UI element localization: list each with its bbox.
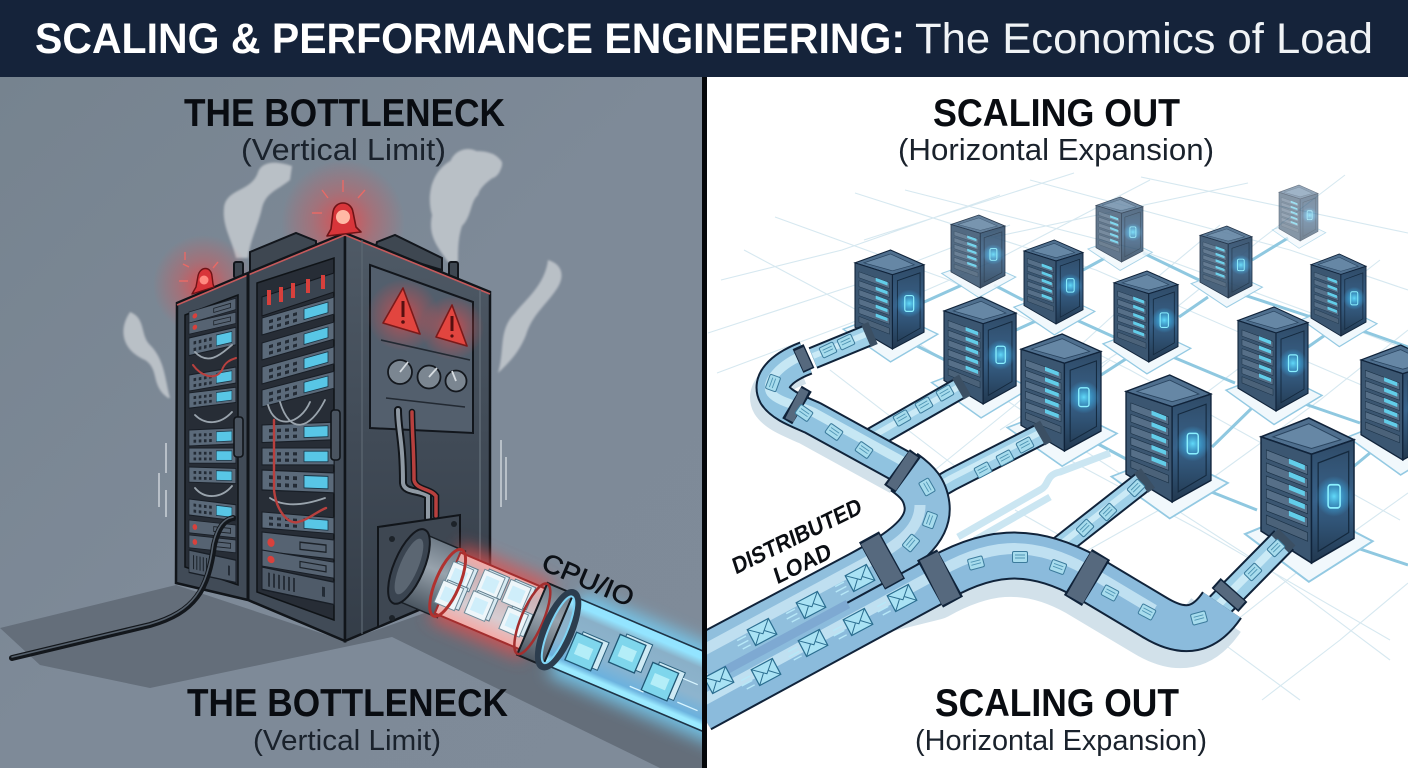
heading: the bottleneck top: (Vertical Limit): [241, 132, 446, 167]
pipe couplings: [792, 333, 1287, 600]
red congested section: [428, 548, 545, 650]
panel: the bottleneck: [0, 77, 777, 768]
data packets in pipes: [765, 334, 1285, 625]
heading: the bottleneck top: [184, 99, 504, 166]
network connection lines: [909, 238, 1408, 565]
panel: scaling out: [690, 77, 1408, 768]
center divider: [702, 77, 707, 768]
server rack cabinet: [176, 233, 490, 641]
right rack server units: [262, 297, 334, 605]
heading: scaling out top: SCALING OUT: [933, 92, 1180, 135]
red alarm beacons: [179, 180, 365, 294]
upper branch pipe: [769, 354, 904, 468]
title banner: The Economics of Load: [915, 15, 1373, 63]
blue flowing section: [546, 598, 702, 732]
red alarm glow: [158, 167, 398, 320]
main upper pipe: [700, 472, 927, 659]
heading: the bottleneck bottom: (Vertical Limit): [253, 725, 441, 757]
floor power cable: [12, 517, 233, 658]
title banner: [0, 0, 1408, 77]
rack interior panels: [185, 258, 334, 620]
heading: the bottleneck bottom: THE BOTTLENECK: [187, 682, 508, 725]
envelopes in main pipe: [690, 564, 917, 701]
server grid: [843, 185, 1408, 582]
heading: scaling out bottom: [915, 682, 1207, 757]
icon: dials: [388, 360, 466, 392]
tangled rack wiring: [193, 345, 326, 522]
smoke plumes: [123, 149, 562, 398]
faint ghost pipe: [958, 453, 1110, 540]
rooftop units: [234, 233, 458, 282]
pipe mounting plate: [378, 515, 460, 627]
heading: the bottleneck top: THE BOTTLENECK: [184, 92, 505, 135]
title banner: SCALING & PERFORMANCE ENGINEERING:: [35, 15, 905, 63]
label: distributed load: DISTRIBUTED: [729, 492, 865, 579]
right rack vent bars: [262, 273, 334, 316]
floor shadow: [0, 585, 702, 768]
rack door handles: [234, 410, 340, 460]
heading: scaling out top: (Horizontal Expansion): [898, 132, 1214, 167]
control panel with warning triangles and dials: [367, 265, 484, 518]
bottleneck pipe: [387, 528, 702, 752]
icon: warning triangles: [369, 282, 482, 358]
pipe drop shadow: [694, 368, 1216, 700]
main lower pipe: [700, 549, 1222, 709]
dark pipe coupling: [513, 582, 582, 670]
thin branch pipes: [813, 333, 1284, 610]
left rack server units: [189, 298, 236, 582]
vibration lines: [159, 440, 506, 517]
perspective floor grid: [708, 173, 1408, 700]
pipe network: [694, 333, 1287, 709]
heading: scaling out top: [898, 92, 1214, 167]
heading: scaling out bottom: (Horizontal Expansion): [915, 725, 1207, 757]
heading: scaling out bottom: SCALING OUT: [935, 682, 1179, 725]
grey pipe collar: [387, 528, 466, 618]
label: CPU/IO: CPU/IO: [538, 547, 639, 612]
label: distributed load: LOAD: [771, 537, 834, 589]
panel cables: [398, 410, 436, 518]
merged pipe seam: [700, 604, 848, 684]
heading: the bottleneck bottom: [187, 689, 508, 756]
